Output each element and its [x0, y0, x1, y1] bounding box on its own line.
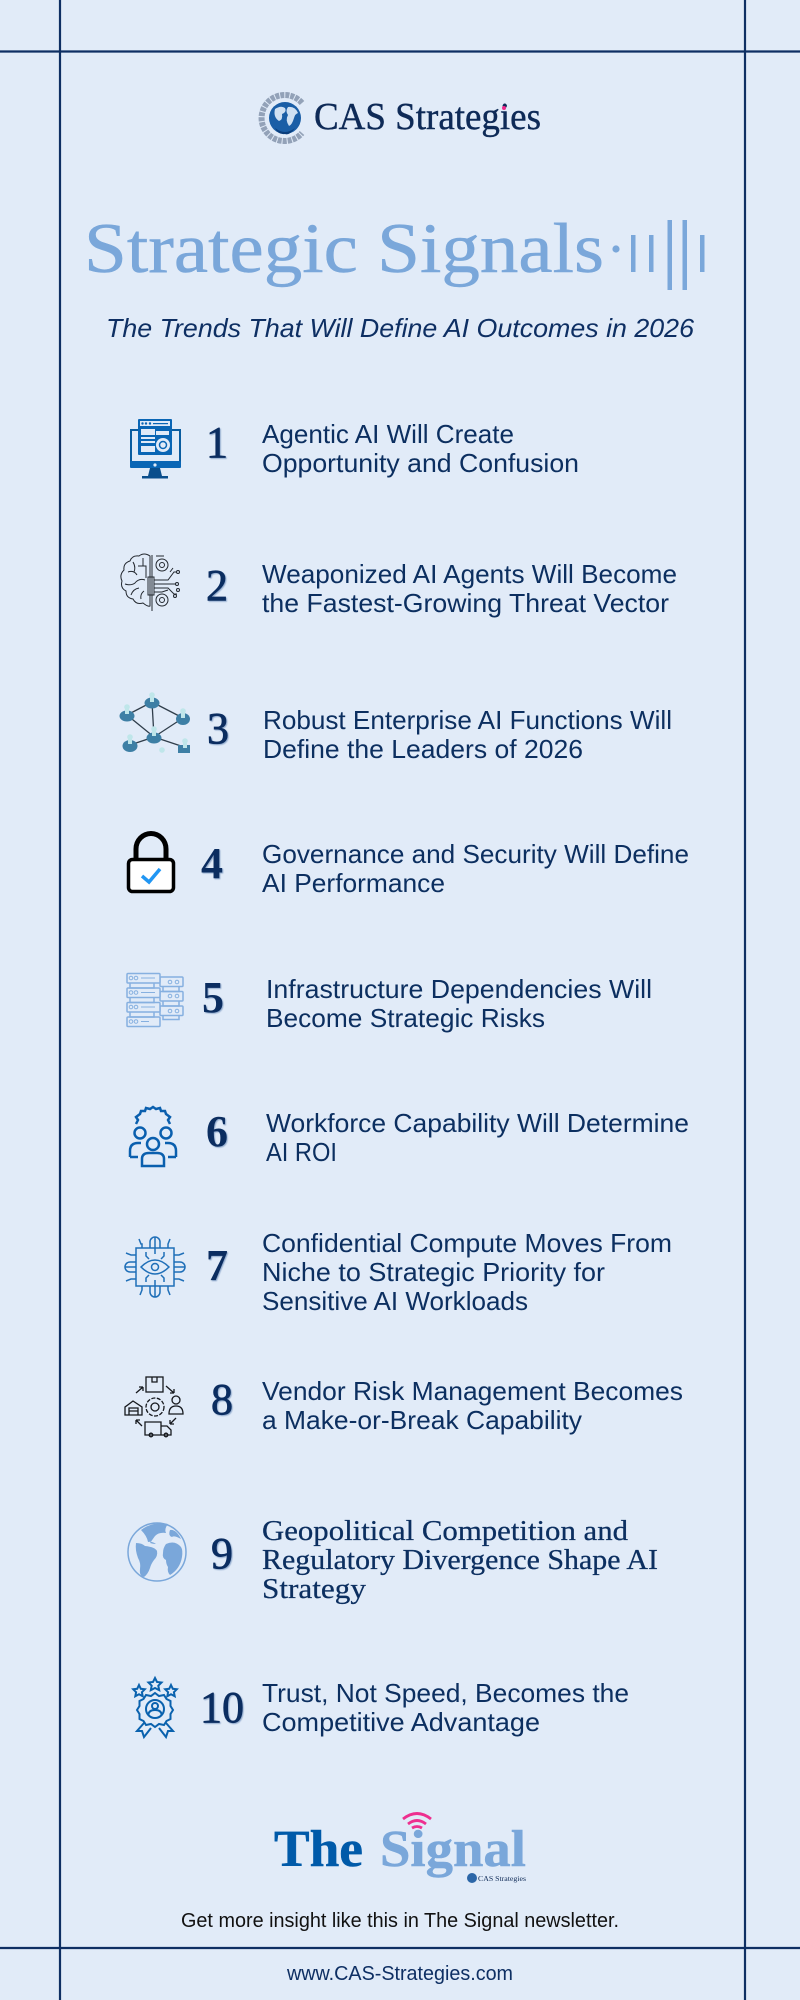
- number: 7: [206, 1241, 228, 1290]
- number: 1: [206, 418, 228, 467]
- item text: Opportunity and Confusion: [262, 448, 579, 478]
- item 4: [128, 833, 689, 898]
- item 10: [133, 1678, 629, 1737]
- item text: Confidential Compute Moves From: [262, 1228, 672, 1258]
- item 1: [130, 418, 579, 478]
- number: 3: [207, 704, 229, 753]
- item text: Trust, Not Speed, Becomes the: [262, 1678, 629, 1708]
- item 5: [127, 973, 652, 1033]
- item text: Strategy: [262, 1574, 367, 1605]
- icon: padlock with check: [128, 833, 174, 892]
- item text: [262, 559, 677, 618]
- item text: Niche to Strategic Priority for: [262, 1257, 605, 1287]
- small CAS Strategies mark: CAS Strategies: [478, 1874, 526, 1883]
- newsletter call to action: Get more insight like this in The Signal newsletter.: [181, 1910, 619, 1932]
- item text: Robust Enterprise AI Functions Will: [263, 705, 672, 735]
- number: 6: [206, 1107, 228, 1156]
- icon: team with gear: [130, 1107, 176, 1166]
- number: 5: [202, 973, 224, 1022]
- item 6: [130, 1107, 689, 1167]
- logo: CAS Strategies: [262, 95, 541, 141]
- item text: Become Strategic Risks: [266, 1003, 545, 1033]
- icon: network of people: [120, 692, 190, 753]
- item text: AI Performance: [262, 868, 445, 898]
- icon: supply chain cycle: [125, 1377, 183, 1437]
- item 3: [120, 692, 672, 764]
- icon: globe in circuit C: [262, 95, 302, 141]
- website url: www.CAS-Strategies.com: [286, 1963, 513, 1985]
- number: 9: [211, 1529, 233, 1578]
- item 8: [125, 1375, 683, 1437]
- logo word: The: The: [274, 1821, 363, 1878]
- icon: brain with circuits: [121, 554, 180, 611]
- item text: [262, 839, 689, 898]
- item 9: [128, 1516, 658, 1605]
- item text: Infrastructure Dependencies Will: [266, 974, 652, 1004]
- logo word: Signal: Signal: [380, 1821, 526, 1878]
- item text: Regulatory Divergence Shape AI: [262, 1545, 658, 1576]
- number: 2: [206, 561, 228, 610]
- icon: globe: [128, 1523, 186, 1581]
- item text: Workforce Capability Will Determine: [266, 1108, 689, 1138]
- item text: [263, 705, 672, 764]
- item 7: [125, 1228, 672, 1316]
- item text: [262, 1678, 629, 1737]
- item text: Weaponized AI Agents Will Become: [262, 559, 677, 589]
- item text: Geopolitical Competition and: [262, 1516, 628, 1547]
- number: 4: [201, 839, 223, 888]
- item text: Vendor Risk Management Becomes: [262, 1376, 683, 1406]
- item text: Sensitive AI Workloads: [262, 1286, 528, 1316]
- item text: AI ROI: [266, 1137, 337, 1167]
- title text: Strategic Signals: [84, 210, 604, 288]
- item text: Define the Leaders of 2026: [263, 734, 583, 764]
- icon: award badge with stars: [133, 1678, 177, 1737]
- icon: chip with eye: [125, 1237, 185, 1297]
- item text: [266, 1108, 689, 1167]
- item text: Competitive Advantage: [262, 1707, 540, 1737]
- item text: Agentic AI Will Create: [262, 419, 514, 449]
- icon: monitor with code window: [130, 419, 181, 478]
- icon: server racks: [127, 974, 183, 1026]
- icon: pink wifi arcs: [403, 1814, 431, 1828]
- item text: [262, 1516, 658, 1605]
- item text: [262, 1376, 683, 1435]
- item text: a Make-or-Break Capability: [262, 1405, 582, 1435]
- item text: [266, 974, 652, 1033]
- title: [84, 210, 704, 290]
- subtitle: The Trends That Will Define AI Outcomes in 2026: [106, 313, 695, 343]
- logo: The Signal: [274, 1814, 526, 1883]
- number: 10: [200, 1683, 244, 1732]
- logo wordmark: CAS Strategies: [314, 96, 541, 138]
- item text: Governance and Security Will Define: [262, 839, 689, 869]
- icon: signal bars: [612, 220, 704, 290]
- item text: [262, 1228, 672, 1316]
- number: 8: [211, 1375, 233, 1424]
- item text: [262, 419, 579, 478]
- item 2: [121, 554, 677, 618]
- item text: the Fastest-Growing Threat Vector: [262, 588, 669, 618]
